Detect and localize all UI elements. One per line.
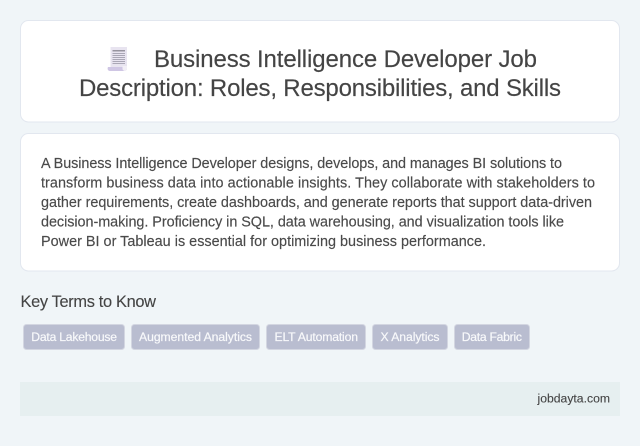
title: [79, 46, 561, 102]
text block: description: A Business Intelligence Developer designs, develops, and manages BI solutions to: [41, 156, 562, 172]
heading: key terms: Key Terms to Know: [20, 293, 156, 311]
title: Business Intelligence Developer Job: [154, 46, 537, 73]
chip: ELT Automation: [266, 324, 366, 350]
footer text: jobdayta.com: [536, 392, 610, 406]
chip: X Analytics: X Analytics: [380, 330, 440, 344]
panel: description card: [20, 134, 620, 271]
chip: Augmented Analytics: Augmented Analytics: [139, 330, 252, 344]
chip: X Analytics: [372, 324, 448, 350]
chip: Data Lakehouse: Data Lakehouse: [31, 330, 117, 344]
panel: title card: [20, 20, 620, 122]
footer bar: [20, 382, 620, 416]
chip: Augmented Analytics: [132, 324, 260, 350]
text block: description: gather requirements, create dashboards, and generate reports that support data-driven: [41, 195, 592, 211]
icon: receipt scroll: [108, 47, 127, 71]
text block: description: transform business data into actionable insights. They collaborate with stakeholders to: [41, 176, 595, 192]
chip: Data Lakehouse: [24, 324, 124, 350]
text block: description: Power BI or Tableau is essential for optimizing business performance.: [41, 234, 486, 250]
chips: key terms: [24, 324, 530, 350]
chip: ELT Automation: ELT Automation: [274, 330, 358, 344]
text block: description: decision-making. Proficiency in SQL, data warehousing, and visualization tools like: [41, 214, 564, 230]
chip: Data Fabric: [454, 324, 530, 350]
title: Description: Roles, Responsibilities, and Skills: [79, 75, 561, 102]
chip: Data Fabric: Data Fabric: [462, 330, 522, 344]
text block: description: [41, 156, 595, 250]
